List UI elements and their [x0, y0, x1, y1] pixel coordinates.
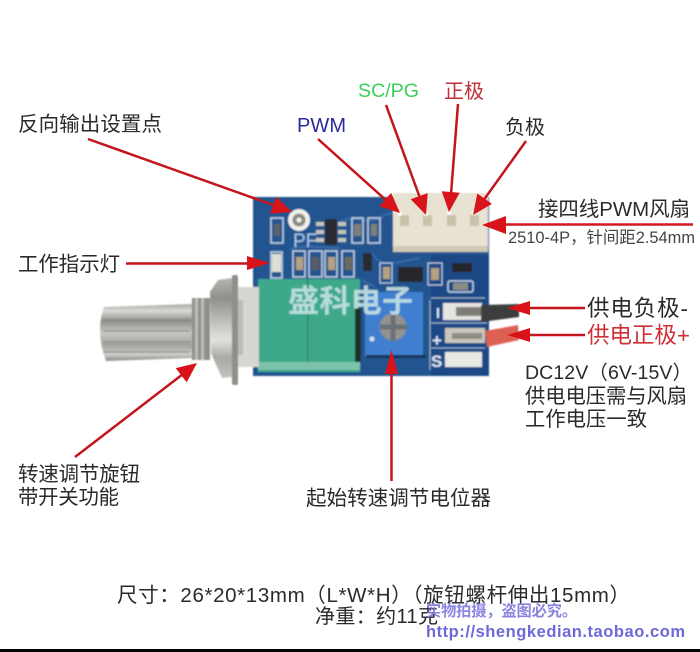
label: speed knob — [18, 463, 140, 509]
reverse output set point pad: PF — [293, 231, 317, 252]
red positive wire — [485, 325, 519, 347]
arrow: fan connector — [482, 216, 693, 234]
arrow: start speed trimmer — [385, 350, 398, 481]
green housing — [258, 279, 360, 372]
threaded shaft — [192, 298, 210, 360]
note: supply voltage — [525, 362, 692, 431]
label: supply negative: 供电负极- — [587, 296, 688, 321]
bottom black bar — [0, 649, 700, 652]
blue trim potentiometer — [365, 292, 426, 358]
label: speed knob: 带开关功能 — [18, 486, 119, 509]
metal body — [238, 287, 259, 367]
label: connector spec: 2510-4P，针间距2.54mm — [508, 229, 695, 247]
note: supply voltage: DC12V（6V-15V） — [525, 362, 692, 384]
circuit board — [253, 197, 489, 376]
knob potentiometer — [100, 275, 361, 385]
hex nut — [210, 278, 232, 378]
pad outlines and solder pads: + — [432, 331, 442, 350]
pad outlines and solder pads — [430, 298, 487, 371]
label: negative: 负极 — [505, 116, 545, 139]
pad outlines and solder pads: S — [431, 352, 442, 371]
arrow: speed knob — [75, 363, 197, 457]
module photo: PWM fan controller board — [100, 193, 519, 385]
arrow: negative pin — [473, 141, 526, 215]
note: supply voltage: 供电电压需与风扇 — [525, 385, 687, 408]
label: SC/PG: SC/PG — [358, 80, 419, 102]
dimensions text: 尺寸：26*20*13mm（L*W*H）（旋钮螺杆伸出15mm） — [117, 584, 630, 607]
watermark: real photo notice: 实物拍摄，盗图必究。 — [426, 602, 577, 620]
reverse output set point pad — [288, 209, 317, 252]
arrow: supply negative — [507, 301, 585, 315]
arrow: positive pin — [442, 104, 460, 212]
watermark brand text: 盛科电子 — [288, 284, 413, 319]
label: supply positive: 供电正极+ — [587, 323, 690, 348]
watermark: shop url: http://shengkedian.taobao.com — [426, 623, 685, 641]
net weight text: 净重：约11克 — [315, 605, 438, 628]
arrow: reverse output set point — [88, 139, 292, 214]
arrow: PWM pin — [318, 139, 400, 213]
label: connect four-wire PWM fan: 接四线PWM风扇 — [538, 198, 690, 221]
black negative wire — [481, 304, 519, 322]
arrow: supply positive — [507, 328, 585, 342]
label: status light: 工作指示灯 — [18, 253, 120, 276]
label: start speed trimmer: 起始转速调节电位器 — [306, 487, 491, 510]
washer — [232, 275, 238, 385]
arrow: status indicator — [126, 256, 270, 270]
label: PWM: PWM — [297, 115, 346, 137]
white 4-pin connector — [393, 193, 488, 252]
note: supply voltage: 工作电压一致 — [525, 408, 647, 431]
SMD components — [271, 218, 473, 292]
label: positive: 正极 — [444, 80, 484, 103]
knurled knob — [100, 304, 192, 361]
label: speed knob: 转速调节旋钮 — [18, 463, 140, 486]
board traces — [290, 212, 420, 287]
board darker lower right panel — [431, 255, 489, 376]
arrow: SC/PG pin — [386, 105, 428, 215]
label: reverse output set point: 反向输出设置点 — [18, 113, 162, 136]
